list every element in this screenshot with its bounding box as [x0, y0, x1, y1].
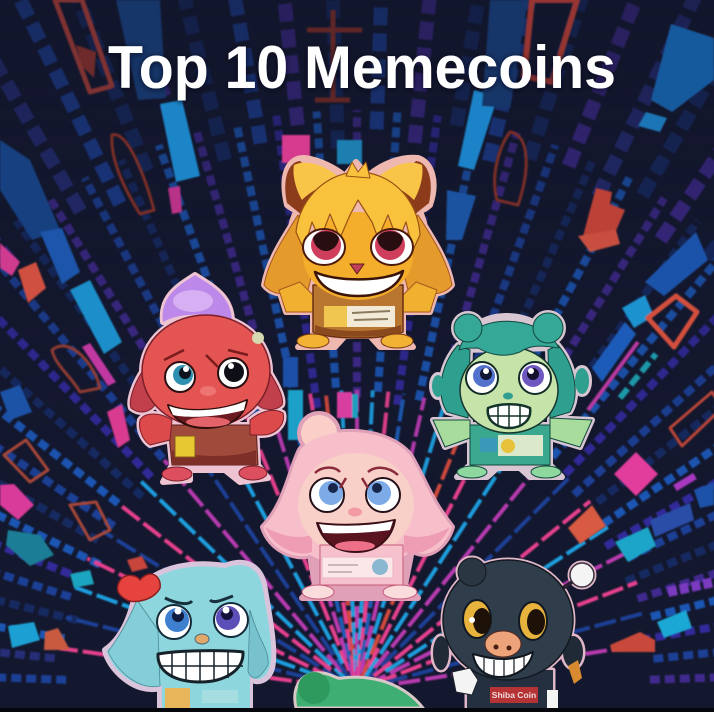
eyes [164, 350, 248, 392]
name plate [490, 687, 538, 703]
badge [480, 435, 543, 456]
mouth [168, 400, 247, 428]
character: dark navy mascot [433, 558, 594, 708]
eyes [463, 600, 547, 640]
eyes [310, 468, 400, 512]
grin [473, 652, 533, 677]
open mouth [317, 520, 395, 552]
grin [315, 271, 403, 296]
nose [348, 508, 362, 516]
flower [252, 332, 264, 344]
character: red mascot with purple bun [130, 275, 283, 482]
character: light blue mascot [105, 563, 273, 708]
eyes [303, 229, 413, 265]
bottom black strip [0, 708, 714, 712]
title: Top 10 Memecoins [108, 34, 616, 101]
grin [158, 651, 243, 682]
name plate: Shiba Coin [492, 690, 536, 700]
name tag [322, 557, 393, 578]
nose [195, 634, 209, 644]
eyes [466, 362, 551, 394]
nose [350, 264, 364, 274]
nose [503, 392, 513, 400]
snout [485, 631, 521, 657]
badge [175, 436, 195, 457]
character: pink mascot [263, 414, 452, 599]
nose [200, 386, 216, 396]
badge [165, 688, 238, 708]
grin [488, 404, 530, 428]
name tag [324, 306, 395, 327]
character: green mascot peeking at bottom [295, 672, 423, 708]
heart bow [117, 574, 160, 602]
character: yellow cat mascot [264, 158, 452, 348]
character: teal mascot [432, 313, 592, 478]
eyes [157, 596, 248, 639]
